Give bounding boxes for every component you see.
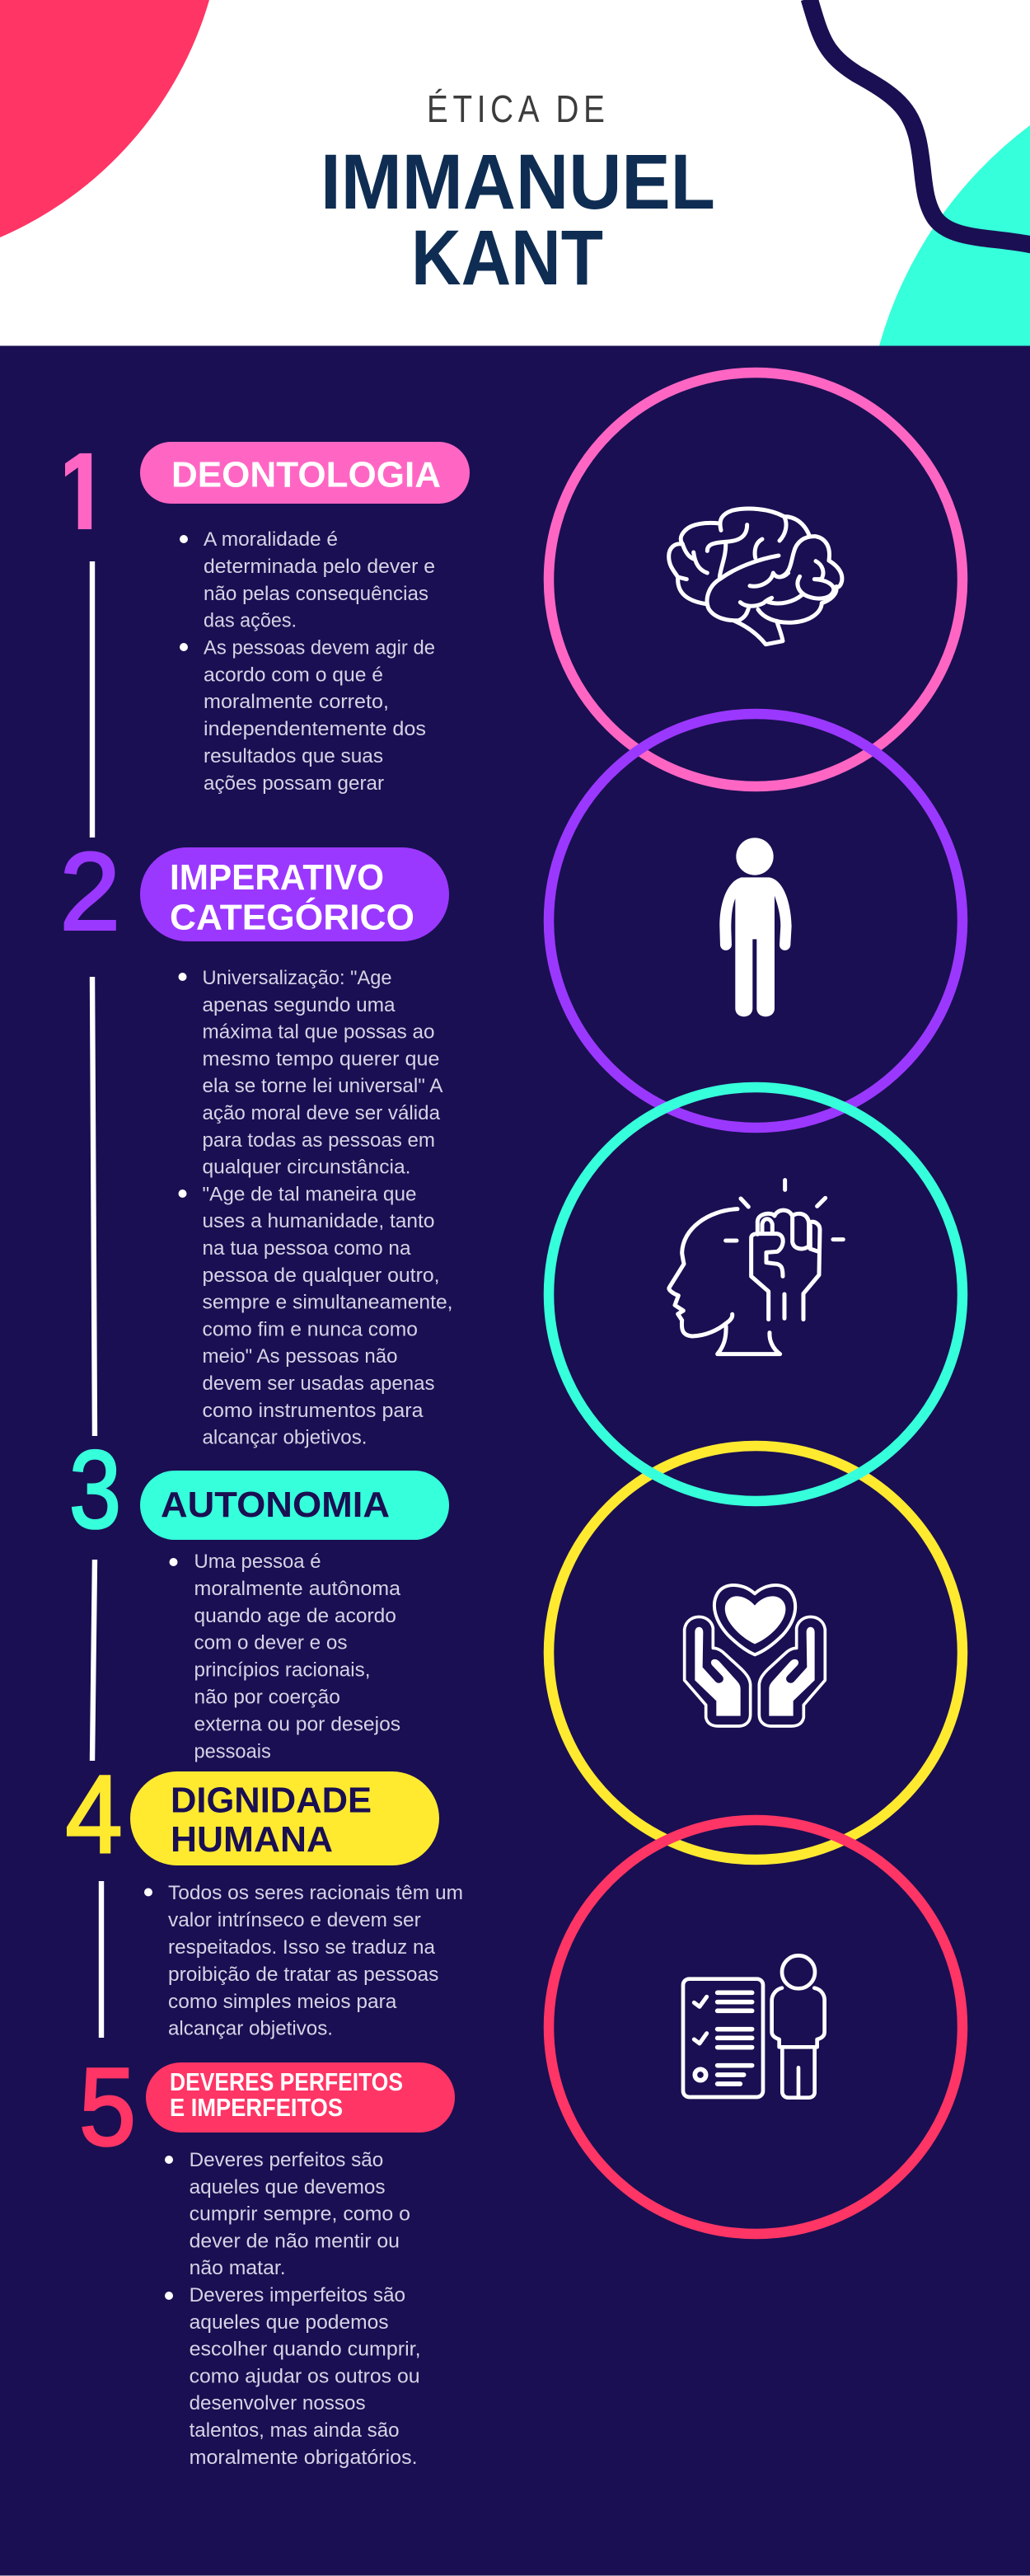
bullet text: devem ser usadas apenas [203,1372,435,1395]
bullet text: pessoa de qualquer outro, [203,1265,440,1287]
bullet text: moralmente obrigatórios. [190,2447,418,2469]
pill heading: CATEGÓRICO [170,897,414,938]
icon: hands holding heart [685,1585,825,1726]
bullet text: valor intrínseco e devem ser [168,1909,421,1931]
bullet text: determinada pelo dever e [204,556,435,578]
bullet text: desenvolver nossos [190,2392,366,2414]
pill heading: DEVERES PERFEITOS [170,2067,403,2096]
bullet text: alcançar objetivos. [203,1427,368,1449]
connector lines [92,561,101,2038]
bullet text: das ações. [204,610,297,631]
bullet text: Uma pessoa é [194,1551,321,1573]
bullet text: aqueles que podemos [190,2311,389,2334]
title: ÉTICA DE [427,88,605,130]
title: KANT [411,214,603,302]
bullet text: sempre e simultaneamente, [203,1292,453,1314]
bullet text: externa ou por desejos [194,1713,400,1735]
section 4: dignidade humana [66,1753,463,2040]
pill heading: DEONTOLOGIA [171,455,441,495]
number 5: 5 [79,2046,136,2169]
bullet text: Deveres perfeitos são [190,2149,383,2171]
title: IMMANUEL [321,138,715,226]
bullet text: Deveres imperfeitos são [190,2284,405,2306]
pill heading: E IMPERFEITOS [170,2093,343,2122]
section 5: deveres perfeitos e imperfeitos [79,2046,455,2469]
bullet text: para todas as pessoas em [203,1129,435,1152]
header [0,0,1030,346]
bullet text: alcançar objetivos. [168,2018,333,2040]
pill heading: DIGNIDADE [171,1781,372,1821]
bullet text: As pessoas devem agir de [204,636,435,659]
bullet text: acordo com o que é [204,664,383,686]
bullet text: ações possam gerar [204,772,384,795]
bullet text: princípios racionais, [194,1659,371,1682]
bullet text: Todos os seres racionais têm um [168,1882,463,1904]
bullet text [170,1551,400,1762]
bullet text: A moralidade é [204,528,338,551]
icon: head and raised fist [669,1180,843,1354]
number 1: 1 [48,428,118,568]
bullet text: Universalização: "Age [203,967,392,989]
bullet text [180,528,435,795]
pill heading: AUTONOMIA [161,1485,390,1525]
bullet text: com o dever e os [194,1632,348,1654]
bullet text: ela se torne lei universal" A [203,1075,443,1097]
bullet text: aqueles que devemos [190,2176,386,2198]
circle rings [549,373,962,2234]
bullet text: dever de não mentir ou [190,2230,400,2252]
bullet text: máxima tal que possas ao [203,1021,435,1044]
bullet text: "Age de tal maneira que [203,1183,417,1205]
number 2: 2 [59,831,120,953]
bullet text: uses a humanidade, tanto [203,1210,435,1232]
bullet text: cumprir sempre, como o [190,2203,410,2226]
bullet text: moralmente correto, [204,691,389,713]
pill heading [146,2062,455,2133]
bullet text [165,2149,421,2469]
bullet text: não pelas consequências [204,583,428,605]
pill heading: HUMANA [171,1819,333,1860]
bullet text: como simples meios para [168,1991,397,2013]
bullet text: resultados que suas [204,745,383,767]
bullet text: qualquer circunstância. [203,1157,410,1179]
bullet text: como ajudar os outros ou [190,2365,420,2387]
number 4: 4 [66,1753,122,1876]
bullet text: não por coerção [194,1687,340,1708]
pill heading [140,1471,449,1540]
decorative navy wave [809,0,1030,245]
title [321,88,715,302]
pill heading: IMPERATIVO [170,857,384,898]
bullet text [144,1882,463,2040]
icon: brain [669,509,842,645]
bullet text [178,967,453,1449]
bullet text: não matar. [190,2257,286,2279]
icon: person [719,838,792,1016]
bullet text: quando age de acordo [194,1605,396,1627]
bullet text: na tua pessoa como na [203,1237,411,1260]
bullet text: moralmente autônoma [194,1578,400,1600]
pill heading [140,847,449,941]
pill heading [130,1771,439,1865]
number 3: 3 [69,1429,121,1551]
icon: checklist and person [683,1955,825,2098]
bullet text: escolher quando cumprir, [190,2339,421,2361]
bullet text: pessoais [194,1740,271,1762]
bullet text: como fim e nunca como [203,1318,418,1340]
bullet text: mesmo tempo querer que [203,1048,440,1070]
bullet text: independentemente dos [204,718,426,740]
section 1: deontologia [48,428,470,795]
bullet text: respeitados. Isso se traduz na [168,1936,435,1959]
pill heading [140,442,470,504]
bullet text: meio" As pessoas não [203,1345,397,1368]
decorative coral circle [0,0,209,237]
bullet text: apenas segundo uma [203,994,396,1016]
bullet text: proibição de tratar as pessoas [168,1964,438,1986]
decorative teal circle [879,125,1030,346]
bullet text: ação moral deve ser válida [203,1102,440,1124]
section 2: imperativo categórico [59,831,453,1449]
bullet text: talentos, mas ainda são [190,2419,400,2442]
section 3: autonomia [69,1429,449,1762]
bullet text: como instrumentos para [203,1400,424,1422]
